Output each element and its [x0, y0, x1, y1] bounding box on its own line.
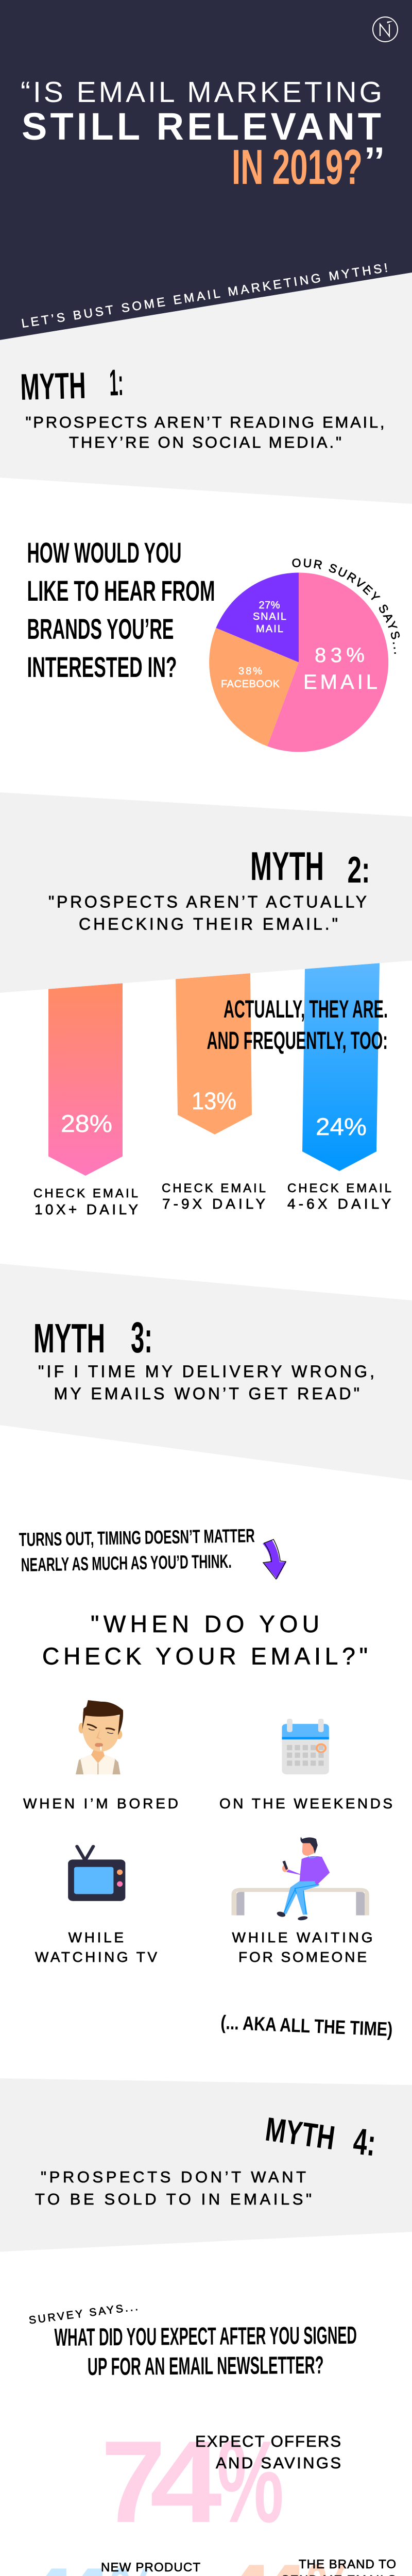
pie label: snail mail: MAIL [256, 623, 283, 635]
heading: myth 3: 3: [131, 1313, 152, 1362]
myth 4 quote: "PROSPECTS DON’T WANT [41, 2168, 306, 2186]
label: 10x+ daily [33, 1187, 138, 1217]
heading: myth 2: MYTH [250, 843, 324, 889]
label: while waiting for someone: WHILE WAITING [232, 1929, 373, 1945]
survey question: brands: HOW WOULD YOU [27, 536, 181, 569]
label: 10x+ daily: CHECK EMAIL [33, 1187, 138, 1200]
heading: when do you check your email: CHECK YOUR EMAIL?" [42, 1642, 368, 1669]
myth 2 quote [48, 892, 367, 934]
panel: myth 1 [0, 273, 412, 504]
label: while watching tv: WHILE [68, 1929, 124, 1945]
heading: when do you check your email: "WHEN DO YOU [91, 1611, 319, 1637]
myth 3 quote: MY EMAILS WON’T GET READ" [54, 1384, 359, 1403]
text: turns out [19, 1525, 255, 1575]
survey question: brands: BRANDS YOU’RE [27, 613, 174, 645]
stat: 74% expect offers [101, 2416, 341, 2547]
panel: myth 4 [0, 2078, 412, 2252]
label: when i'm bored: WHEN I’M BORED [23, 1795, 178, 1811]
callout: actually they are [207, 996, 388, 1055]
pie label: facebook [221, 666, 280, 690]
panel: myth 2 [0, 792, 412, 993]
label: 10x+ daily: 10X+ DAILY [35, 1201, 138, 1217]
myth 4 quote: TO BE SOLD TO IN EMAILS" [35, 2190, 312, 2208]
label: survey says: SURVEY SAYS... [28, 2301, 139, 2327]
heading: myth 2: 2: [347, 850, 370, 891]
myth 1 quote: THEY’RE ON SOCIAL MEDIA." [69, 433, 341, 451]
label: while watching tv: WATCHING TV [35, 1949, 157, 1965]
label: while waiting for someone [232, 1929, 373, 1965]
stat: 44% brand to send emails: THE BRAND TO [299, 2557, 396, 2571]
pie label: facebook: 38% [238, 666, 262, 677]
pie label: email: 83% [315, 644, 365, 667]
stat: 44% product information: NEW PRODUCT [101, 2561, 200, 2574]
pie label: snail mail: 27% [259, 600, 280, 611]
stat: 44% product information [22, 2550, 200, 2576]
myth 4 quote [35, 2168, 312, 2208]
panel: hero [0, 0, 412, 340]
stat: 44% brand to send emails [220, 2547, 396, 2576]
heading: myth 4: MYTH [263, 2110, 337, 2157]
stat: 74% expect offers: AND SAVINGS [216, 2454, 341, 2472]
pie label: facebook: FACEBOOK [221, 679, 280, 690]
stat: 74% expect offers: 7 [101, 2416, 166, 2547]
arrow bar: 7-9x daily: 13% [192, 1087, 236, 1114]
pie chart [209, 558, 400, 752]
title: STILL RELEVANT [22, 105, 381, 148]
arrow: down to question [263, 1539, 286, 1579]
arrow bar: 7-9x daily [176, 973, 252, 1134]
chart: check email frequency arrows [48, 963, 380, 1176]
heading: myth 4: 4: [351, 2121, 377, 2164]
survey question: brands: LIKE TO HEAR FROM [27, 574, 215, 607]
banner text: LET’S BUST SOME EMAIL MARKETING MYTHS! [21, 261, 389, 331]
text: turns out: TURNS OUT, TIMING DOESN’T MATTER [19, 1525, 255, 1550]
label: on the weekends: ON THE WEEKENDS [219, 1795, 392, 1811]
label: 4-6x daily: 4-6X DAILY [287, 1196, 391, 1212]
heading: myth 1: MYTH [20, 365, 86, 408]
arrow bar: 4-6x daily: 24% [316, 1113, 367, 1140]
survey question: brands [27, 536, 215, 683]
text: turns out: NEARLY AS MUCH AS YOU’D THINK. [21, 1551, 232, 1575]
label: 7-9x daily [162, 1181, 266, 1212]
label: while waiting for someone: FOR SOMEONE [238, 1949, 367, 1965]
icon: person waiting on bench [231, 1837, 369, 1921]
myth 3 quote [38, 1362, 374, 1403]
label: 4-6x daily: CHECK EMAIL [287, 1181, 391, 1195]
arrow bar: 4-6x daily [302, 963, 380, 1171]
myth 3 quote: "IF I TIME MY DELIVERY WRONG, [38, 1362, 374, 1381]
title: “IS EMAIL MARKETING [21, 76, 382, 109]
stat: 74% expect offers: % [217, 2416, 284, 2547]
label: while watching tv [35, 1929, 157, 1965]
label: 7-9x daily: 7-9X DAILY [162, 1196, 265, 1212]
survey question: brands: INTERESTED IN? [27, 651, 177, 683]
myth 2 quote: "PROSPECTS AREN’T ACTUALLY [48, 892, 367, 911]
myth 2 quote: CHECKING THEIR EMAIL." [79, 915, 338, 934]
pie label: email [303, 644, 377, 693]
icon: bored man [76, 1700, 123, 1774]
pie label: snail mail [253, 600, 286, 635]
label: 4-6x daily [287, 1181, 391, 1212]
pie label: snail mail: SNAIL [253, 611, 286, 622]
heading: when do you check your email [42, 1611, 368, 1669]
icon: tv [68, 1846, 125, 1901]
pie label: email: EMAIL [303, 671, 377, 693]
arrow bar: 10x+ daily [48, 983, 123, 1176]
stat: 74% expect offers: 4 [150, 2416, 222, 2547]
icon: calendar [282, 1719, 329, 1774]
question: what did you expect [54, 2322, 357, 2381]
label: 7-9x daily: CHECK EMAIL [162, 1181, 266, 1195]
stat: 74% expect offers: EXPECT OFFERS [195, 2432, 341, 2450]
title: ” [365, 137, 384, 192]
myth 1 quote [26, 413, 384, 451]
curved label: our survey says: OUR SURVEY SAYS... [292, 558, 400, 654]
icon: logo [373, 17, 398, 42]
arrow bar: 10x+ daily: 28% [61, 1110, 112, 1137]
panel: myth 1: 1: [109, 362, 124, 403]
myth 1 quote: "PROSPECTS AREN’T READING EMAIL, [26, 413, 384, 431]
heading: myth 3: MYTH [33, 1315, 105, 1361]
title [21, 76, 384, 195]
panel: myth 3 [0, 1264, 412, 1481]
